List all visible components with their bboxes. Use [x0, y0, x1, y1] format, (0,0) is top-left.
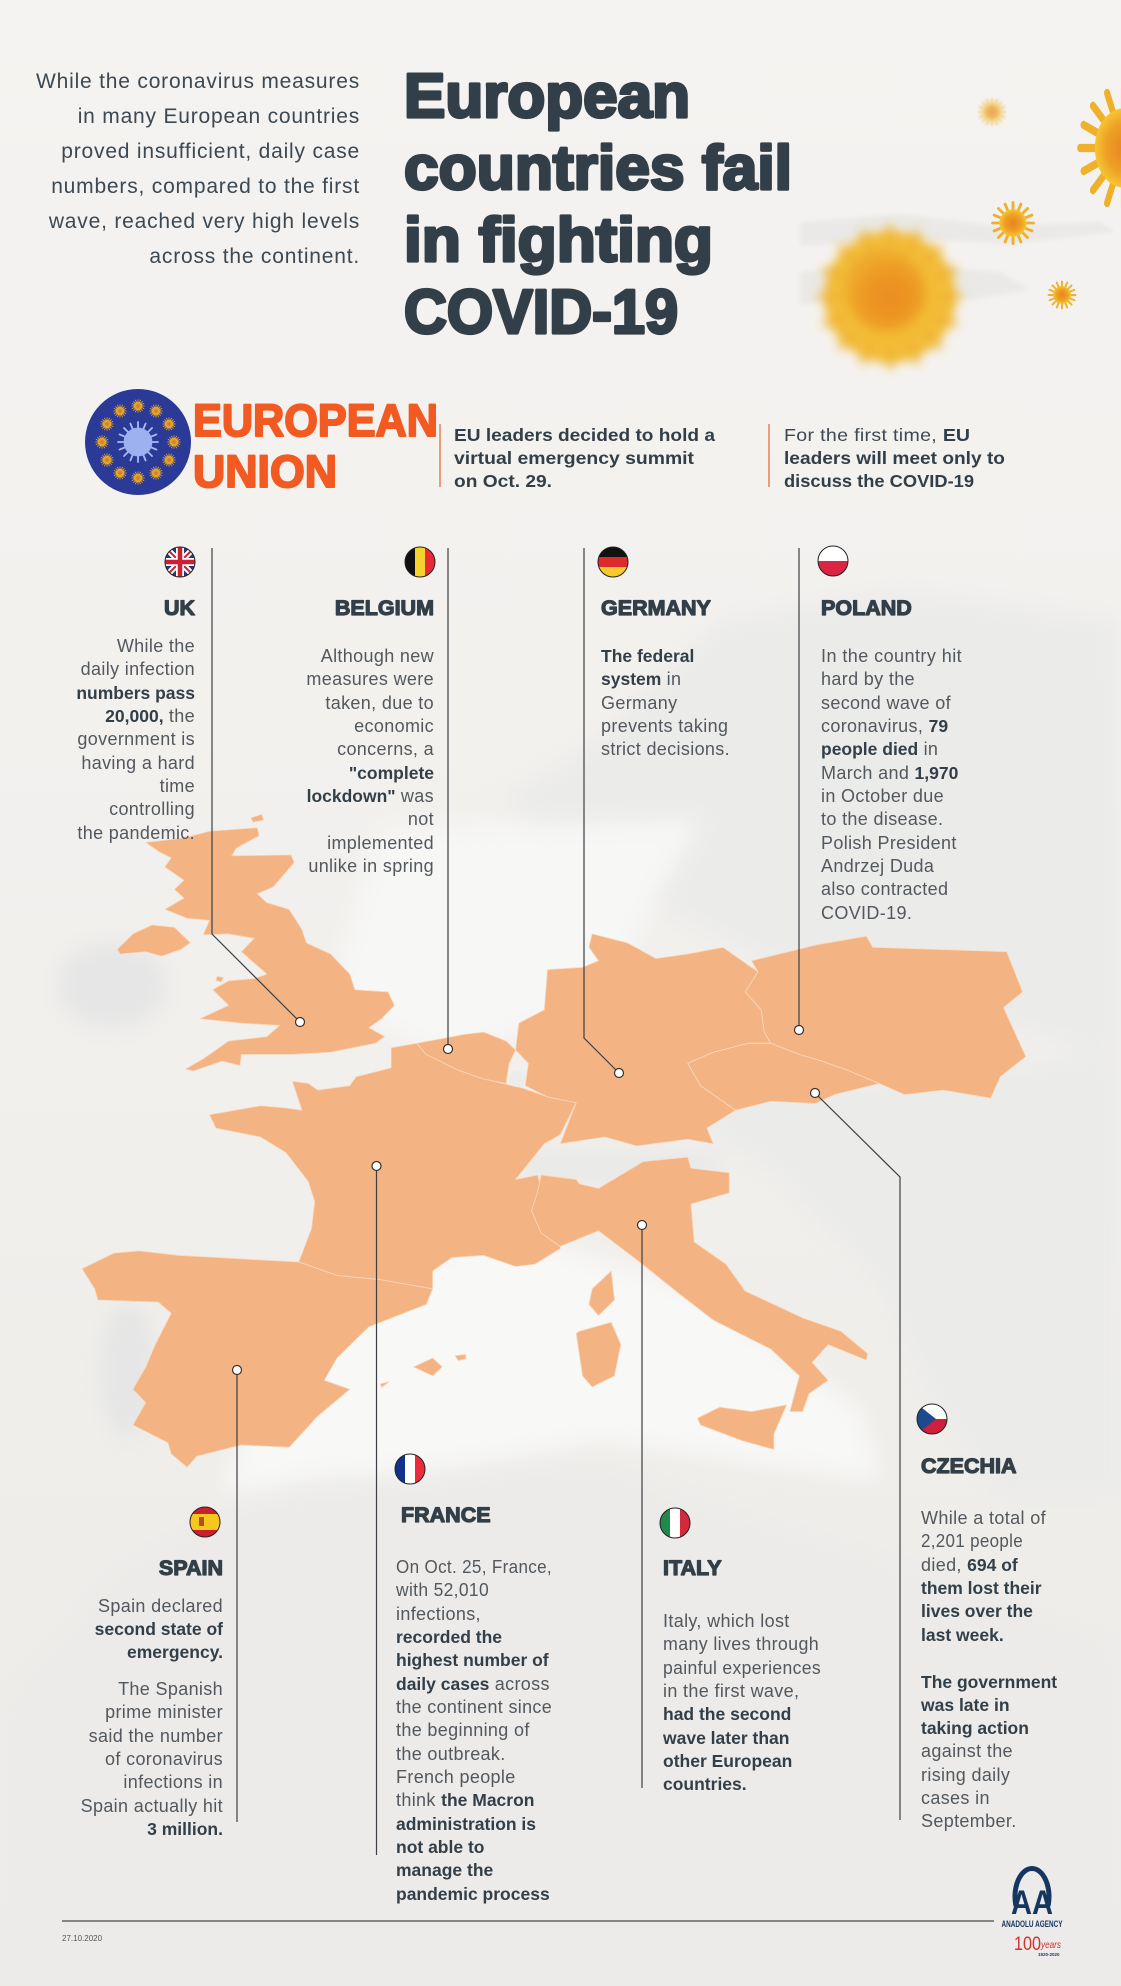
- text: Poland: people died in: [821, 739, 938, 759]
- heading: Czechia: CZECHIA: [921, 1454, 1017, 1478]
- EU note: first time: discuss the COVID-19: [784, 471, 974, 491]
- intro text: numbers, compared to the first: [51, 175, 360, 198]
- heading: Belgium: BELGIUM: [335, 596, 434, 620]
- text: UK: government is: [77, 729, 195, 749]
- text: Belgium: measures were: [306, 669, 434, 689]
- icon: UK flag: [165, 547, 195, 577]
- text: Czechia: 2,201 people: [921, 1531, 1023, 1551]
- text: France: not able to: [396, 1837, 484, 1857]
- text: Germany: strict decisions.: [601, 739, 730, 759]
- text: Italy: [662, 1611, 821, 1794]
- map: France: [209, 1043, 576, 1289]
- title: European: [404, 62, 690, 131]
- text: Belgium: concerns, a: [337, 739, 435, 759]
- panel: France: [395, 1454, 552, 1904]
- EU note: summit: on Oct. 29.: [454, 471, 552, 491]
- text: UK: While the: [117, 636, 195, 656]
- text: Spain: infections in: [123, 1772, 223, 1792]
- text: Czechia: against the: [921, 1741, 1013, 1761]
- map: Czechia: [688, 1043, 879, 1110]
- icon: France flag: [395, 1454, 425, 1484]
- logo: Anadolu Agency: ANADOLU AGENCY: [1002, 1919, 1062, 1929]
- text: Spain: 3 million.: [147, 1819, 223, 1839]
- text: Belgium: lockdown" was: [307, 786, 434, 806]
- text: Poland: March and 1,970: [821, 763, 959, 783]
- text: Italy: wave later than: [662, 1728, 789, 1748]
- map: Spain: [82, 1251, 433, 1467]
- text: Poland: hard by the: [821, 669, 915, 689]
- heading: Poland: POLAND: [821, 596, 912, 620]
- text: Italy: countries.: [663, 1774, 747, 1794]
- panel: Poland: [818, 546, 962, 923]
- heading: Spain: SPAIN: [159, 1556, 223, 1580]
- text: France: the outbreak.: [396, 1744, 506, 1764]
- text: Poland: COVID-19.: [821, 903, 912, 923]
- text: Czechia: [920, 1508, 1057, 1831]
- text: Italy: Italy, which lost: [663, 1611, 790, 1631]
- text: Spain: second state of: [95, 1619, 223, 1639]
- text: Spain: [81, 1596, 223, 1839]
- panel: Belgium: [306, 547, 435, 876]
- text: Spain: said the number: [89, 1726, 223, 1746]
- text: Italy: painful experiences: [663, 1658, 821, 1678]
- logo: Anadolu Agency: [1002, 1869, 1062, 1957]
- EU note: summit: [440, 424, 715, 491]
- panel: Italy: [660, 1508, 821, 1794]
- heading: Italy: ITALY: [663, 1556, 722, 1580]
- text: Germany: system in: [601, 669, 681, 689]
- text: France: the continent since: [396, 1697, 552, 1717]
- text: Belgium: economic: [354, 716, 434, 736]
- panel: Czechia: [917, 1404, 1057, 1831]
- title: countries fail: [404, 134, 792, 203]
- text: France: manage the: [396, 1860, 494, 1880]
- EU note: first time: [769, 424, 1005, 491]
- map: United Kingdom: [117, 814, 394, 1071]
- text: Czechia: rising daily: [921, 1765, 1010, 1785]
- intro text: in many European countries: [78, 105, 360, 128]
- text: Poland: in October due: [821, 786, 944, 806]
- text: Italy: other European: [663, 1751, 792, 1771]
- text: Italy: many lives through: [663, 1634, 819, 1654]
- map: Corsica: [589, 1271, 614, 1316]
- title: COVID-19: [404, 278, 678, 347]
- panel: Germany: [598, 547, 730, 759]
- text: France: the beginning of: [396, 1720, 530, 1740]
- icon: Czechia flag: [917, 1404, 947, 1434]
- panel: Spain: [81, 1507, 223, 1839]
- text: Czechia: The government: [921, 1672, 1057, 1692]
- text: Poland: to the disease.: [821, 809, 943, 829]
- text: Belgium: taken, due to: [325, 693, 434, 713]
- map: Italy: [532, 1157, 868, 1450]
- text: Czechia: last week.: [921, 1625, 1004, 1645]
- icon: Poland flag: [818, 546, 848, 576]
- text: France: recorded the: [396, 1627, 502, 1647]
- title: in fighting: [404, 206, 713, 275]
- map: Belgium: [417, 1032, 516, 1083]
- text: Czechia: taking action: [921, 1718, 1029, 1738]
- text: Germany: The federal: [601, 646, 694, 666]
- heading: European Union: EUROPEAN: [193, 395, 438, 446]
- text: France: administration is: [396, 1814, 536, 1834]
- heading: UK: UK: [164, 596, 195, 620]
- virus decorations: [821, 88, 1121, 366]
- text: Spain: prime minister: [105, 1702, 223, 1722]
- text: Germany: Germany: [601, 693, 677, 713]
- text: Poland: also contracted: [821, 879, 948, 899]
- text: UK: 20,000, the: [105, 706, 195, 726]
- EU note: first time: For the first time, EU: [784, 425, 970, 445]
- logo: Anadolu Agency: 100: [1014, 1934, 1041, 1955]
- map: Germany: [516, 934, 771, 1146]
- text: France: pandemic process: [396, 1884, 550, 1904]
- EU note: summit: virtual emergency summit: [454, 448, 694, 468]
- text: Belgium: not: [408, 809, 434, 829]
- text: Czechia: them lost their: [921, 1578, 1042, 1598]
- panel: UK: [76, 547, 195, 843]
- footer rule: [62, 1920, 994, 1922]
- logo: Anadolu Agency: years: [1040, 1940, 1061, 1951]
- intro text: While the coronavirus measures: [36, 70, 360, 93]
- text: Belgium: "complete: [349, 763, 434, 783]
- text: Spain: Spain actually hit: [81, 1796, 223, 1816]
- text: Poland: In the country hit: [821, 646, 962, 666]
- logo: Anadolu Agency: AA: [1011, 1884, 1053, 1922]
- text: Italy: had the second: [663, 1704, 791, 1724]
- text: Poland: Polish President: [821, 833, 957, 853]
- text: Czechia: While a total of: [921, 1508, 1047, 1528]
- heading: Germany: GERMANY: [601, 596, 711, 620]
- map: highlighted European countries: [82, 814, 1026, 1467]
- text: France: daily cases across: [396, 1674, 550, 1694]
- text: France: highest number of: [396, 1650, 549, 1670]
- text: UK: having a hard: [81, 753, 195, 773]
- text: UK: controlling: [109, 799, 195, 819]
- text: France: On Oct. 25, France,: [396, 1557, 552, 1577]
- text: Germany: prevents taking: [601, 716, 728, 736]
- text: UK: numbers pass: [76, 683, 195, 703]
- text: Poland: Andrzej Duda: [821, 856, 935, 876]
- map: Balearic Islands: [380, 1354, 466, 1387]
- text: Belgium: unlike in spring: [308, 856, 434, 876]
- text: France: infections,: [396, 1604, 481, 1624]
- text: France: think the Macron: [396, 1790, 534, 1810]
- heading: France: FRANCE: [401, 1503, 491, 1527]
- text: Czechia: lives over the: [921, 1601, 1033, 1621]
- text: Poland: coronavirus, 79: [821, 716, 948, 736]
- text: Poland: second wave of: [821, 693, 952, 713]
- text: Spain: emergency.: [127, 1642, 223, 1662]
- connector lines: [212, 548, 900, 1855]
- text: Czechia: September.: [921, 1811, 1017, 1831]
- icon: EU emblem with virus stars: [85, 389, 191, 495]
- EU note: summit: EU leaders decided to hold a: [454, 425, 715, 445]
- text: Germany: [601, 646, 730, 759]
- text: UK: [76, 636, 195, 843]
- icon: Belgium flag: [405, 547, 435, 577]
- text: UK: the pandemic.: [77, 823, 195, 843]
- heading: European Union: UNION: [193, 446, 337, 497]
- text: Czechia: cases in: [921, 1788, 990, 1808]
- map: Poland: [745, 936, 1026, 1098]
- text: France: with 52,010: [395, 1580, 489, 1600]
- logo: Anadolu Agency: 1920-2020: [1038, 1952, 1060, 1957]
- icon: Italy flag: [660, 1508, 690, 1538]
- text: Spain: of coronavirus: [105, 1749, 223, 1769]
- text: Czechia: was late in: [920, 1695, 1010, 1715]
- EU note: first time: leaders will meet only to: [784, 448, 1005, 468]
- text: Spain: Spain declared: [98, 1596, 223, 1616]
- heading: European Union: [193, 395, 438, 497]
- text: UK: time: [160, 776, 195, 796]
- text: Belgium: Although new: [321, 646, 435, 666]
- date: 27.10.2020: [62, 1934, 103, 1943]
- title: [404, 62, 792, 347]
- text: Poland: [821, 646, 962, 923]
- text: Belgium: implemented: [327, 833, 434, 853]
- icon: Germany flag: [598, 547, 628, 577]
- text: Italy: in the first wave,: [663, 1681, 799, 1701]
- text: France: French people: [396, 1767, 516, 1787]
- text: Spain: The Spanish: [118, 1679, 223, 1699]
- intro text: [36, 70, 360, 268]
- text: France: [395, 1557, 552, 1904]
- intro text: wave, reached very high levels: [48, 210, 360, 233]
- text: UK: daily infection: [81, 659, 195, 679]
- text: Czechia: died, 694 of: [921, 1555, 1018, 1575]
- intro text: across the continent.: [149, 245, 360, 268]
- text: Belgium: [306, 646, 435, 876]
- icon: Spain flag: [190, 1507, 220, 1537]
- intro text: proved insufficient, daily case: [61, 140, 360, 163]
